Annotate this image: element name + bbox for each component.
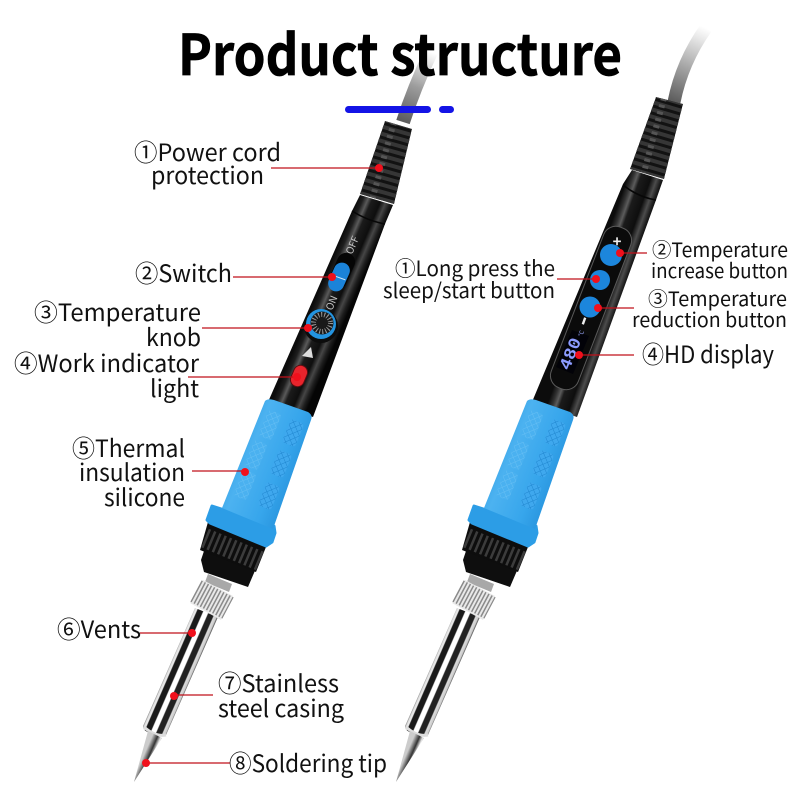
label: sleep/start button: ①Long press the (395, 253, 555, 283)
work indicator light (288, 363, 310, 389)
label: stainless steel casing: ⑦Stainless (218, 664, 339, 699)
label: temperature knob: ③Temperature (34, 293, 201, 328)
label: sleep/start button: sleep/start button (383, 275, 555, 305)
collar groove (352, 211, 385, 224)
HD display (556, 329, 589, 374)
neck (467, 574, 494, 592)
label: HD display: ④HD display (642, 335, 774, 370)
sleeve grip patches (495, 409, 566, 510)
silicone sleeve (484, 399, 574, 529)
sleeve grip patches (233, 409, 304, 510)
label: switch: ②Switch (135, 254, 232, 289)
label: vents: ⑥Vents (57, 610, 141, 645)
casing rim (144, 727, 166, 735)
label: thermal insulation silicone: silicone (104, 478, 185, 513)
sleeve flange (207, 506, 275, 546)
label: soldering tip: ⑧Soldering tip (229, 744, 387, 779)
label: temperature increase button: increase button (651, 255, 788, 284)
casing rim (406, 727, 428, 735)
callout lines and dots (140, 164, 647, 767)
button: temperature reduction (580, 296, 600, 318)
lower collar (463, 548, 519, 587)
triangle mark (302, 347, 313, 358)
label: temperature reduction button: ③Temperature (648, 283, 787, 312)
label: power cord protection: protection (151, 156, 264, 191)
label: temperature knob (34, 293, 201, 353)
label: power cord protection: ①Power cord (134, 133, 281, 168)
strain relief (right) (630, 97, 683, 179)
right soldering iron (532, 28, 706, 417)
label: work indicator light: ④Work indicator (14, 344, 200, 379)
OFF label: OFF (341, 233, 362, 256)
label: power cord protection (134, 133, 281, 191)
soldering tip (396, 731, 424, 782)
knurled ring (452, 580, 495, 620)
label: temperature reduction button (632, 283, 787, 333)
button: temperature increase (600, 244, 622, 266)
plus mark: + (613, 231, 622, 252)
lower assembly (left) (134, 399, 312, 782)
minus mark (582, 317, 586, 325)
stainless casing (405, 608, 480, 736)
power cord (right) (674, 28, 706, 102)
HD display: 480 (557, 336, 587, 373)
knurled ring (190, 580, 233, 620)
stainless casing (143, 608, 218, 736)
nut (200, 522, 266, 572)
label: temperature increase button: ②Temperature (652, 234, 788, 263)
nut (462, 522, 528, 572)
label: stainless steel casing: steel casing (218, 689, 344, 724)
handle body (left) (268, 195, 393, 417)
collar groove (623, 185, 656, 200)
label: thermal insulation silicone: ⑤Thermal (72, 429, 185, 464)
temperature knob (304, 309, 338, 343)
HD display: ℃ (576, 329, 586, 338)
label: work indicator light (14, 344, 200, 404)
neck (205, 574, 232, 592)
strain relief (left) (360, 121, 412, 204)
left soldering iron (268, 52, 431, 417)
label: temperature reduction button: reduction button (632, 304, 787, 333)
label: temperature increase button (651, 234, 788, 284)
label: work indicator light: light (150, 369, 199, 404)
label: thermal insulation silicone (72, 429, 185, 513)
title: Product structure (178, 11, 622, 92)
label: sleep/start button (383, 253, 555, 305)
handle body (right) (532, 170, 663, 417)
power cord (left) (403, 52, 431, 122)
title underline (345, 106, 454, 113)
blue switch (326, 260, 352, 294)
switch groove (326, 250, 358, 292)
button: sleep/start (590, 270, 610, 290)
soldering tip (134, 731, 162, 782)
control panel (547, 223, 635, 393)
sleeve flange (469, 506, 537, 546)
lower assembly (right) (396, 399, 574, 782)
lower collar (201, 548, 257, 587)
silicone sleeve (222, 399, 312, 529)
ON label: ON (321, 293, 340, 312)
label: stainless steel casing (218, 664, 344, 724)
label: temperature knob: knob (146, 318, 201, 353)
label: thermal insulation silicone: insulation (79, 453, 185, 488)
